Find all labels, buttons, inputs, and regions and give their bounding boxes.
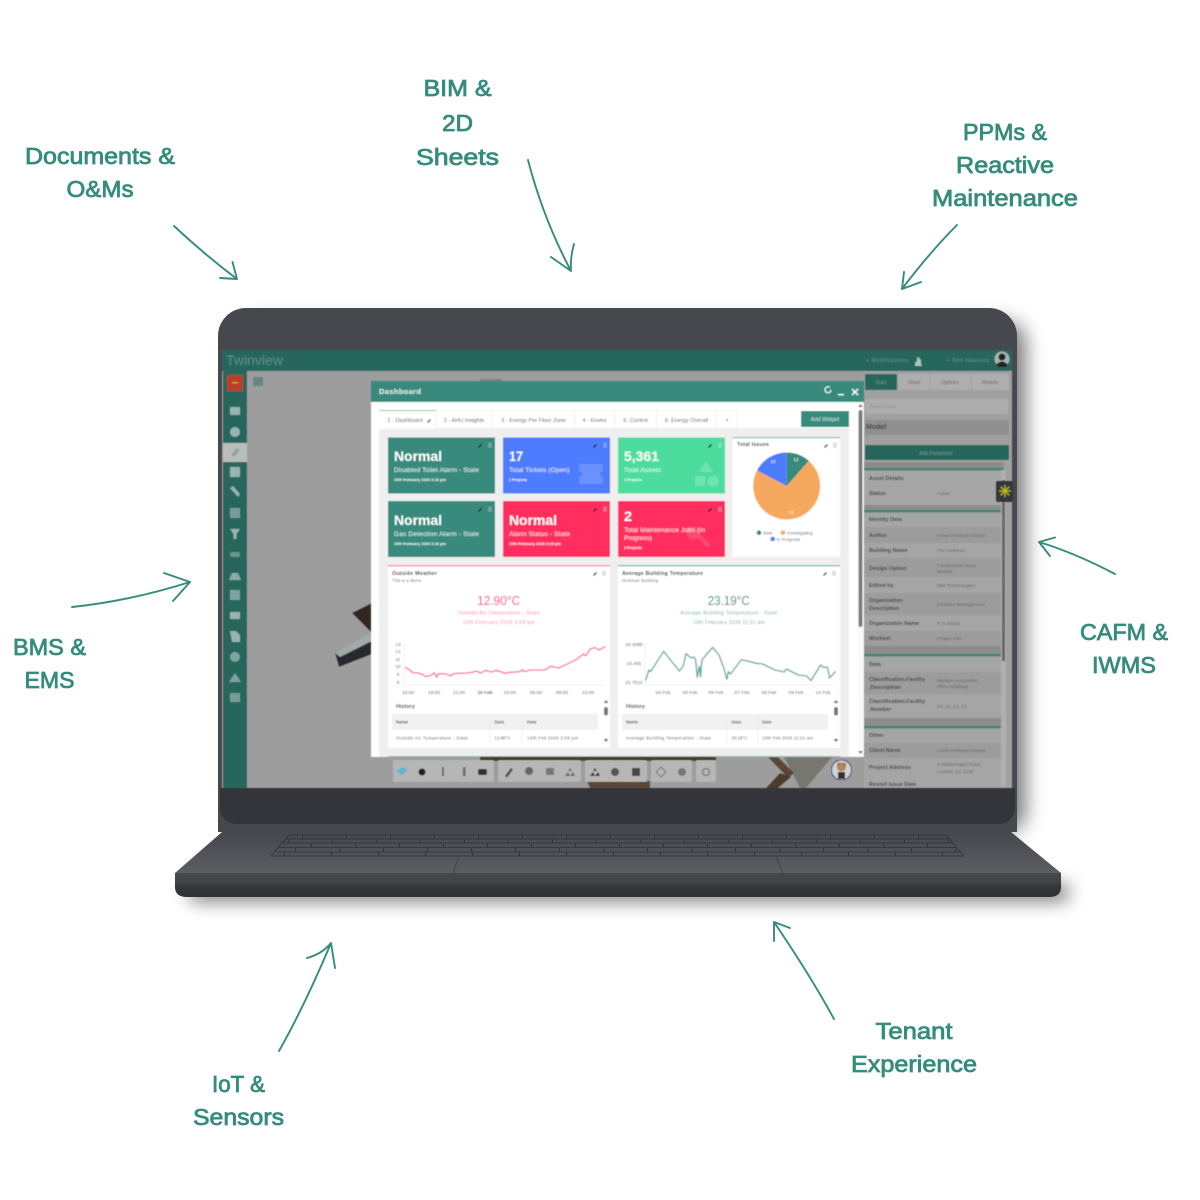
tab bar: 1 - Dashboard xyxy=(387,418,423,424)
right properties panel: Building Name xyxy=(869,548,908,554)
label: PPMs & Reactive Maintenance: PPMs & xyxy=(963,119,1047,145)
history table: Data xyxy=(494,720,505,724)
label: CAFM & IWMS: IWMS xyxy=(1092,652,1156,678)
history table: 10th Feb 2026 11:51 am xyxy=(762,736,813,740)
card: total maintenance jobs: Progress) xyxy=(624,535,652,542)
laptop lid xyxy=(218,308,1017,832)
toolbar icons xyxy=(396,767,710,778)
card: disabled toilet alarm: 10th February 2026 3:16 pm xyxy=(394,478,447,482)
window header xyxy=(371,381,864,402)
panel: average building temperature: Average Building Temperature - State xyxy=(680,610,777,616)
pie chart: 18 xyxy=(770,459,776,464)
right properties panel: Workset xyxy=(869,636,891,642)
line chart: 09 Feb xyxy=(789,690,804,696)
history table: 10th Feb 2026 2:09 pm xyxy=(527,736,578,740)
label: Tenant Experience: Tenant xyxy=(876,1018,953,1044)
line chart: 18:00 xyxy=(428,690,440,696)
card: alarm status: Alarm Status - State xyxy=(509,531,570,538)
right properties panel: BIM Technologies xyxy=(937,583,975,589)
arrow: tenant xyxy=(774,922,834,1019)
line chart: 04 Feb xyxy=(656,690,671,696)
history table: Outside Air Temperature - State xyxy=(396,736,469,740)
panel: average building temperature: Hickman Building xyxy=(622,578,659,583)
arrow: PPMs xyxy=(902,225,957,289)
right properties panel: Data xyxy=(876,380,886,386)
label: Documents & O&Ms: O&Ms xyxy=(66,176,134,202)
card: gas detection alarm: Normal xyxy=(394,512,442,528)
label: IoT & Sensors xyxy=(193,1071,284,1130)
right properties panel: Models xyxy=(982,380,999,386)
pie legend: In Progress xyxy=(776,537,801,542)
line chart: 06 Feb xyxy=(709,690,724,696)
card: gas detection alarm: 10th February 2026 3:16 pm xyxy=(394,542,447,546)
line chart: 21:00 xyxy=(453,690,465,696)
arrow: CAFM xyxy=(1039,538,1115,574)
history table: Average Building Temperature - State xyxy=(626,736,712,740)
line chart: 23.455 xyxy=(627,661,642,667)
right properties panel: Great Portland Estates xyxy=(937,748,986,754)
card: total maintenance jobs xyxy=(618,501,725,557)
right properties panel: Description xyxy=(869,606,900,612)
line chart: 22.7015 xyxy=(625,680,643,686)
card: total assets: 1 Projects xyxy=(624,478,642,482)
panel: average building temperature: 10th February 2026 11:51 am xyxy=(693,620,765,626)
right properties panel: Edited by xyxy=(869,583,895,589)
right properties panel: Active xyxy=(937,491,950,497)
right properties panel xyxy=(864,371,1012,788)
card: total assets: Total Assets xyxy=(624,467,662,474)
label: PPMs & Reactive Maintenance: Reactive xyxy=(956,152,1054,178)
help badge xyxy=(996,481,1013,502)
content background xyxy=(379,428,849,757)
tab bar: 3 - Energy Per Floor Zone xyxy=(501,418,566,424)
laptop base xyxy=(175,832,1061,897)
top navigation bar: + Notifications xyxy=(866,358,908,364)
card: total tickets: 17 xyxy=(509,448,523,464)
line chart: 10 xyxy=(395,664,401,670)
panel: average building temperature: Average Building Temperature xyxy=(622,571,703,577)
card: alarm status xyxy=(503,501,610,557)
panel: outside weather: 12.90°C xyxy=(477,593,520,608)
panel: average building temperature xyxy=(618,565,840,748)
model fragment bottom xyxy=(480,379,832,788)
top navigation bar xyxy=(222,350,1012,371)
label: BIM & 2D Sheets xyxy=(416,75,499,170)
window scrollbar xyxy=(858,402,864,757)
card: alarm status: 10th February 2026 3:15 pm xyxy=(509,542,562,546)
lid lower bezel xyxy=(220,788,1015,824)
menu icon xyxy=(253,377,263,386)
card: alarm status: Normal xyxy=(509,512,557,528)
right properties panel: Model xyxy=(866,424,886,431)
right properties panel: 4 Whitechapel Road, xyxy=(937,762,982,768)
left sidebar xyxy=(223,371,263,788)
right properties panel: Organization xyxy=(869,598,903,604)
right properties panel: Organization Name xyxy=(869,621,919,627)
right properties panel: Asset Details xyxy=(869,476,904,482)
label: BIM & 2D Sheets: 2D xyxy=(442,110,473,136)
panel: outside weather: Outside Weather xyxy=(392,571,437,577)
right properties panel: R G Bailey xyxy=(937,621,961,627)
right properties panel: Search Data xyxy=(870,404,896,409)
panel: total issues pie chart xyxy=(732,437,840,557)
line chart: 05 Feb xyxy=(683,690,698,696)
sidebar icons xyxy=(229,407,241,702)
pie chart: 74 xyxy=(788,510,794,515)
label: CAFM & IWMS xyxy=(1080,619,1168,678)
line chart xyxy=(625,642,836,696)
right properties panel: Other xyxy=(869,733,885,739)
right properties panel: Data xyxy=(869,662,882,668)
history table: Data xyxy=(732,720,742,724)
line chart: 12:00 xyxy=(582,690,594,696)
right properties panel: Revisit Issue Date xyxy=(869,782,916,788)
line chart: 10 Feb xyxy=(477,690,493,696)
window body xyxy=(371,381,864,757)
line chart: 03:00 xyxy=(504,690,516,696)
pie legend: New xyxy=(763,530,773,536)
label: IoT & Sensors: IoT & xyxy=(212,1071,265,1097)
history table: Date xyxy=(527,720,537,724)
tab bar: Add Widget xyxy=(811,417,840,423)
label: PPMs & Reactive Maintenance: Maintenance xyxy=(932,185,1078,211)
window header: Dashboard xyxy=(379,387,421,396)
right properties panel: Project Address xyxy=(869,765,911,771)
card: gas detection alarm xyxy=(388,501,495,557)
tab bar: 4 - Enviro xyxy=(583,418,606,424)
right properties panel: .Description xyxy=(869,685,901,691)
arrow: documents xyxy=(174,226,237,279)
right properties panel: office buildings xyxy=(937,684,969,690)
label: Tenant Experience: Experience xyxy=(851,1051,977,1077)
label: BMS & EMS: EMS xyxy=(24,667,74,693)
laptop screen xyxy=(222,350,1013,788)
history table xyxy=(622,700,838,744)
card: total assets: 5,361 xyxy=(624,448,659,464)
card: gas detection alarm: Gas Detection Alarm - State xyxy=(394,531,479,538)
right properties panel: Project Info xyxy=(937,636,962,642)
card: total assets xyxy=(618,438,725,494)
panel: outside weather: 10th February 2026 2:09 pm xyxy=(463,620,535,626)
arrow: BMS xyxy=(72,573,190,607)
label: PPMs & Reactive Maintenance xyxy=(932,119,1078,211)
line chart xyxy=(395,642,606,696)
tab bar: 2 - AHU Insights xyxy=(444,418,484,424)
tab bar: + xyxy=(725,418,729,424)
card: total maintenance jobs: 2 xyxy=(624,508,632,524)
history table xyxy=(392,700,608,744)
pie legend xyxy=(757,530,813,542)
line chart: 9 xyxy=(397,672,400,678)
pie chart xyxy=(753,452,820,519)
line chart: 13 xyxy=(395,642,401,648)
right properties panel: Classification.Facility xyxy=(869,677,926,683)
next row panels edge xyxy=(388,756,840,757)
right properties panel: En_20_10_10 xyxy=(937,704,967,710)
history table: Name xyxy=(396,720,409,724)
top navigation bar: + Neil Hancock xyxy=(947,358,990,364)
right properties panel: The Hickman xyxy=(937,548,966,554)
right properties panel: Great Portland Estates xyxy=(937,533,986,539)
right properties panel: Multiple occupation xyxy=(937,678,978,684)
panel: outside weather: Outside Air Temperature - State xyxy=(458,610,540,616)
right properties panel: Classification.Facility xyxy=(869,699,926,705)
right properties panel: Add Parameter xyxy=(919,451,953,457)
dashboard window xyxy=(371,381,864,757)
line chart: 15:00 xyxy=(402,690,414,696)
right properties panel: Design Option xyxy=(869,566,907,572)
right properties panel: Construction Issue xyxy=(937,563,977,569)
model fragment left xyxy=(335,603,372,667)
label: BIM & 2D Sheets: BIM & xyxy=(424,75,492,101)
panel scrollbar xyxy=(1001,470,1006,786)
line chart: 10 Feb xyxy=(816,690,831,696)
tab bar: 5. Control xyxy=(623,418,648,424)
history table: Name xyxy=(626,720,639,724)
card: total tickets: Total Tickets (Open) xyxy=(509,467,570,474)
line chart: 09:00 xyxy=(556,690,568,696)
label: Documents & O&Ms xyxy=(25,143,175,202)
pie legend: Investigating xyxy=(787,530,813,536)
card: total maintenance jobs: 1 Projects xyxy=(624,546,642,550)
line chart: 12 xyxy=(395,649,401,655)
right properties panel: London, E1 1EW xyxy=(937,769,974,775)
asset rows xyxy=(864,462,1004,788)
card: disabled toilet alarm: Normal xyxy=(394,448,442,464)
right properties panel: Identity Data xyxy=(869,517,903,523)
card: total tickets xyxy=(503,438,610,494)
card: total tickets: 1 Projects xyxy=(509,478,527,482)
right properties panel: Views xyxy=(907,380,921,386)
label: IoT & Sensors: Sensors xyxy=(193,1104,284,1130)
history table: Date xyxy=(762,720,772,724)
line chart: 07 Feb xyxy=(735,690,750,696)
label: BIM & 2D Sheets: Sheets xyxy=(416,144,499,170)
toolbar xyxy=(393,760,716,782)
right properties panel: Client Name xyxy=(869,748,901,754)
right properties panel: .Number xyxy=(869,707,892,713)
line chart: 8 xyxy=(397,680,400,686)
tab bar: 6. Energy Overall xyxy=(665,418,708,424)
laptop xyxy=(175,308,1061,897)
right properties panel: Options xyxy=(941,380,959,386)
3D viewport background xyxy=(222,350,1012,788)
right properties panel: Facilities Management xyxy=(937,602,986,608)
panel: total issues pie chart: Total Issues xyxy=(737,442,769,448)
card: total maintenance jobs: Total Maintenance Jobs (In xyxy=(624,527,705,534)
panel: outside weather: This is a demo xyxy=(392,578,422,583)
line chart: 24.2085 xyxy=(625,642,643,648)
right properties panel: Models xyxy=(937,569,953,575)
label: BMS & EMS xyxy=(13,634,86,693)
label: CAFM & IWMS: CAFM & xyxy=(1080,619,1168,645)
line chart: 11 xyxy=(396,657,401,663)
history table: 23.19°C xyxy=(732,736,747,740)
card: disabled toilet alarm: Disabled Toilet Alarm - State xyxy=(394,467,479,474)
user avatar xyxy=(832,760,852,780)
label: Documents & O&Ms: Documents & xyxy=(25,143,175,169)
history table: 12.90°C xyxy=(494,736,510,740)
history table: History xyxy=(396,704,416,710)
arrow: IoT xyxy=(279,943,335,1051)
keyboard xyxy=(271,835,964,856)
right properties panel: Status xyxy=(869,491,886,497)
laptop shadows xyxy=(190,322,1068,901)
panel: average building temperature: 23.19°C xyxy=(708,593,750,608)
trackpad xyxy=(453,856,783,873)
label: BMS & EMS: BMS & xyxy=(13,634,86,660)
line chart: 06:00 xyxy=(530,690,542,696)
tab bar xyxy=(379,410,849,429)
right properties panel: Author xyxy=(869,533,888,539)
panel: outside weather xyxy=(388,565,610,748)
line chart: 08 Feb xyxy=(762,690,777,696)
label: Tenant Experience xyxy=(851,1018,977,1077)
add widget button xyxy=(801,411,849,427)
card: disabled toilet alarm xyxy=(388,438,495,494)
top navigation bar: Twinview xyxy=(226,352,284,368)
history table: History xyxy=(626,704,646,710)
pie chart: 12 xyxy=(793,457,799,462)
arrow: BIM xyxy=(528,160,574,271)
